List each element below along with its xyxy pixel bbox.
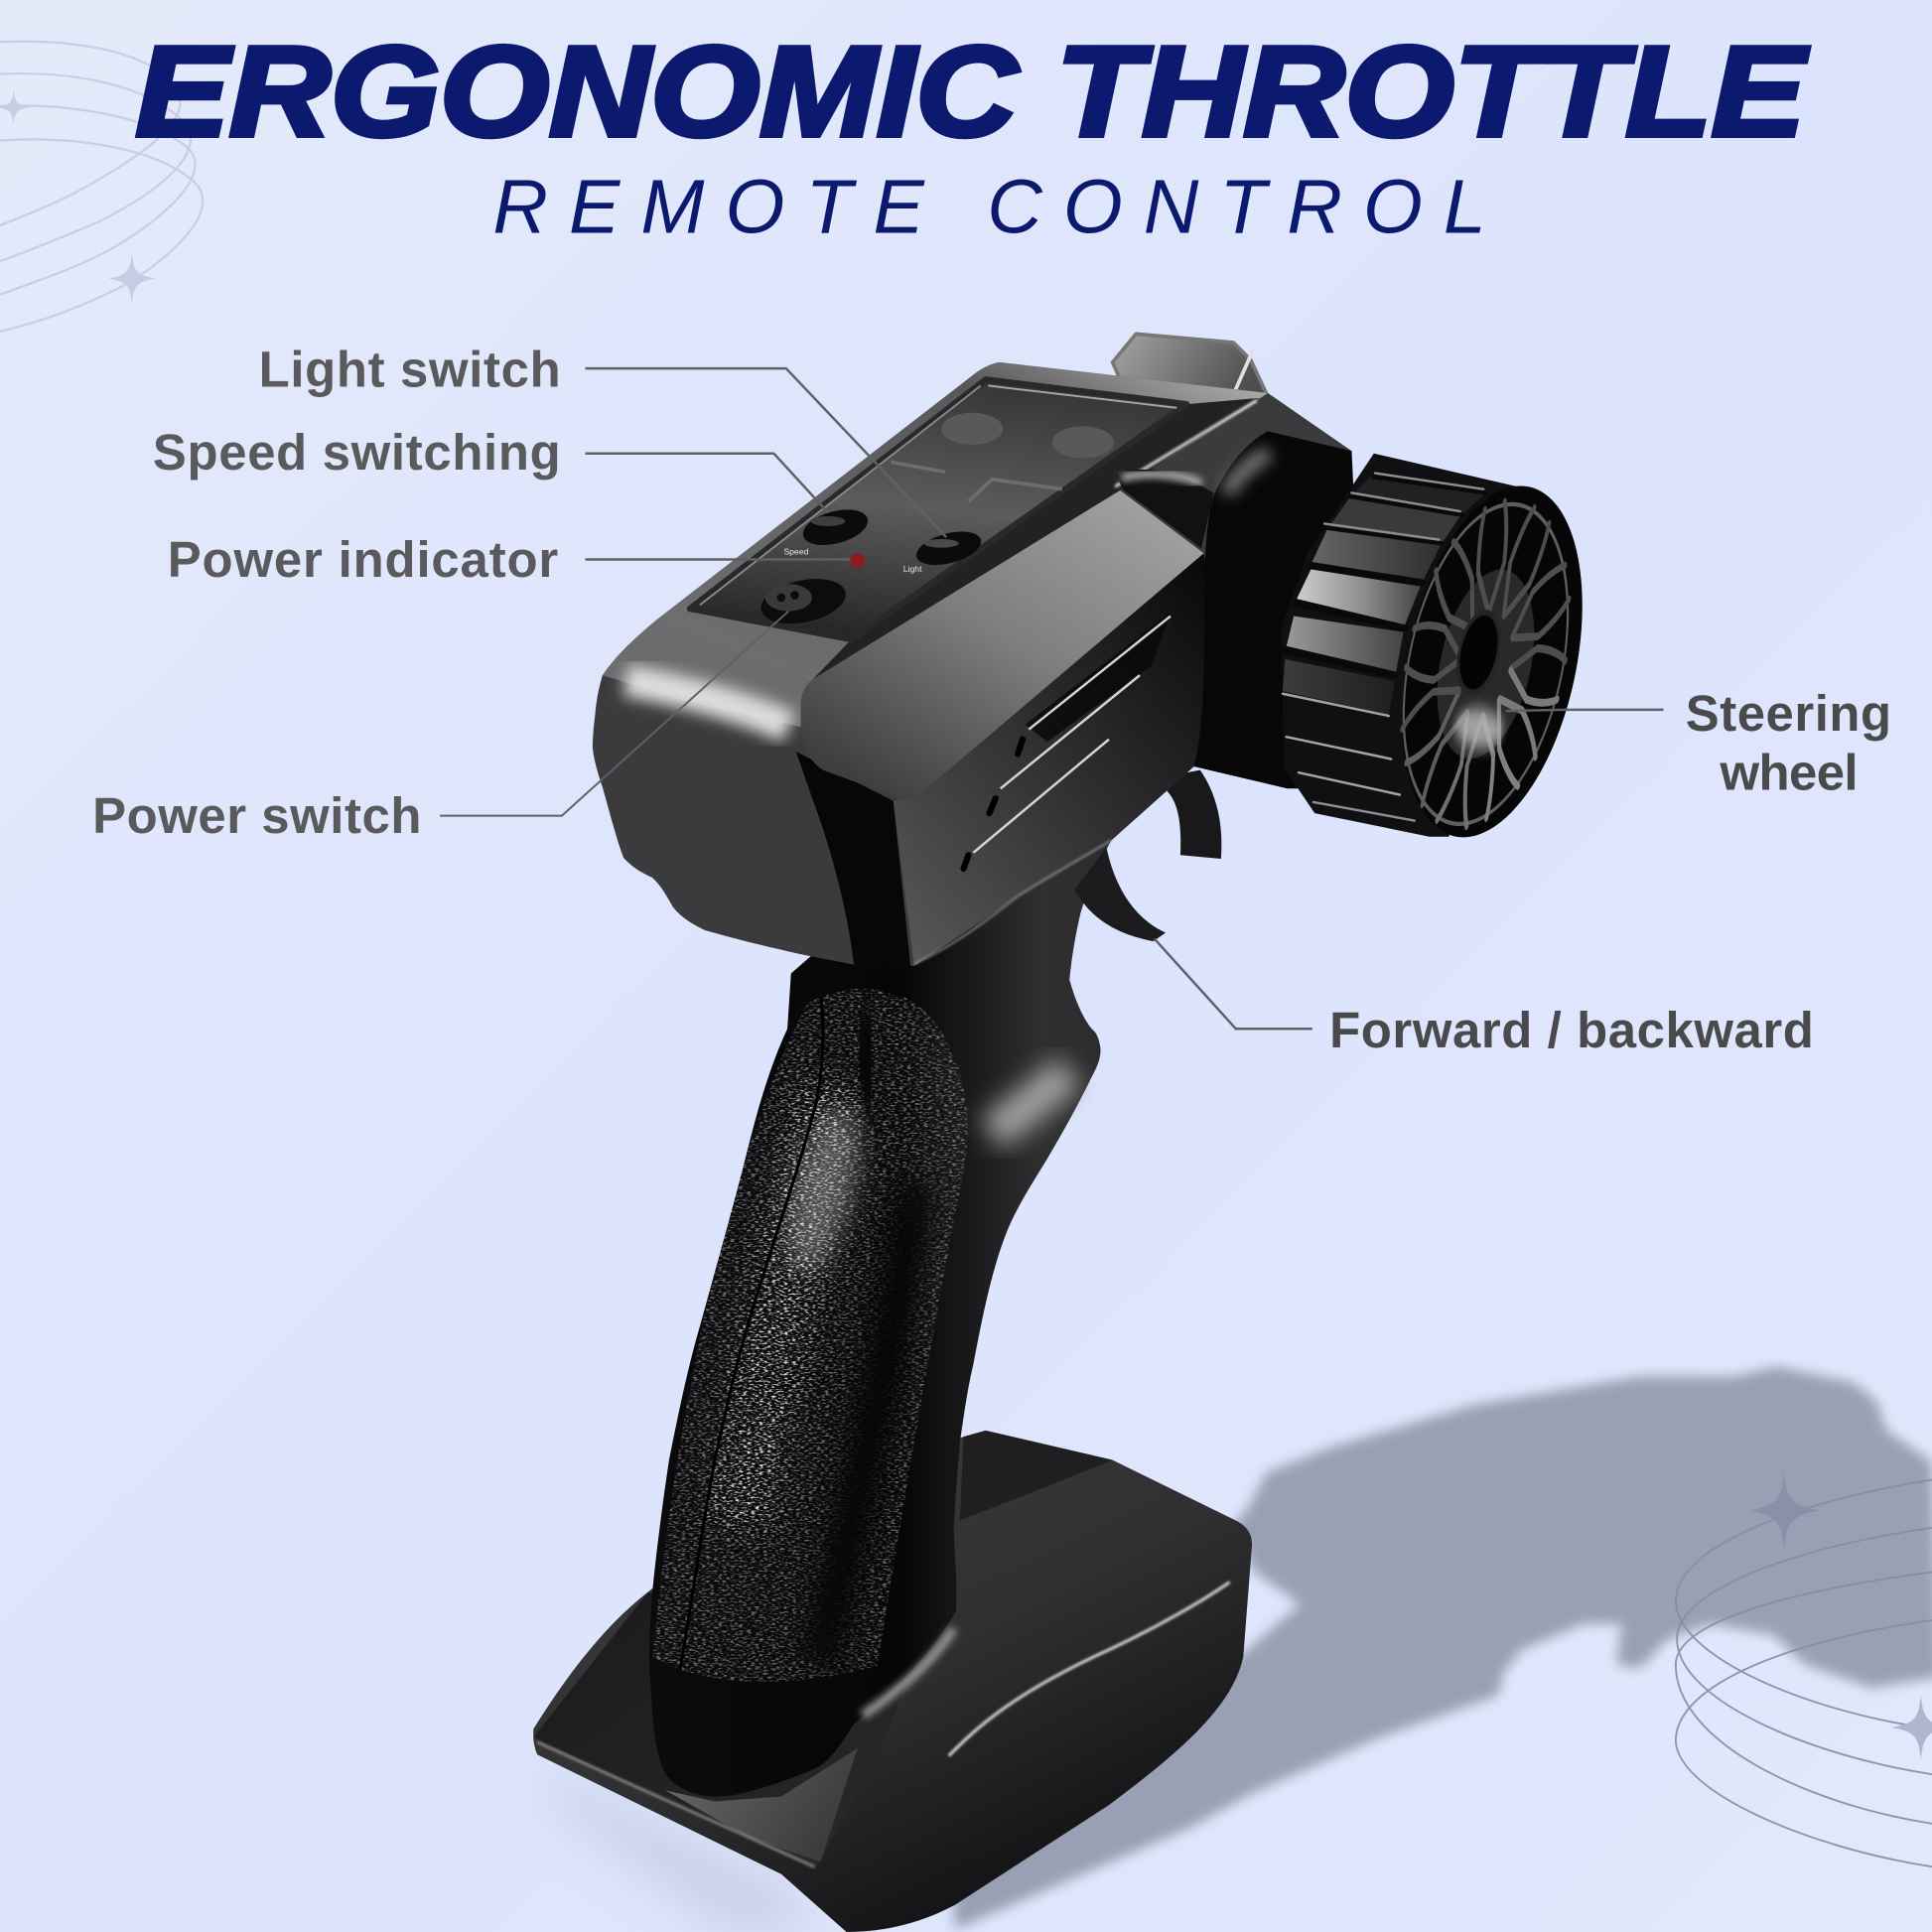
callout: forward / backward: Forward / backward [1329, 1002, 1814, 1058]
callout: forward / backward [1155, 939, 1814, 1058]
title: ERGONOMIC THROTTLE [136, 21, 1809, 164]
lower side face with slits [894, 553, 1232, 966]
power indicator LED [850, 553, 865, 568]
dark strip beside the panel [811, 398, 1259, 681]
callout: power switch: Power switch [92, 787, 421, 844]
callout: power switch [92, 612, 788, 844]
large gray facet [801, 490, 1204, 799]
cast shadow of the controller [936, 1366, 1932, 1930]
control panel [690, 379, 1186, 639]
neck barrel [1194, 431, 1368, 788]
grip leather texture [653, 989, 968, 1682]
light switch button [912, 525, 985, 571]
subtitle: REMOTE CONTROL [492, 165, 1486, 250]
control panel: Light [903, 564, 922, 574]
slit recess [1026, 613, 1171, 742]
lower throttle trigger [1074, 848, 1166, 941]
soft shadow below the base [542, 1768, 819, 1932]
grip and neck [617, 840, 1111, 1796]
callout: power indicator: Power indicator [168, 531, 558, 588]
callout: steering wheel [1506, 685, 1891, 801]
upper trigger [1165, 770, 1221, 859]
black strip [796, 752, 910, 966]
top surface [656, 362, 1268, 681]
controller head body [593, 362, 1351, 966]
decorative orbit rings: top left [0, 42, 203, 332]
steering wheel [1194, 431, 1611, 854]
callout: speed switching [153, 424, 828, 512]
speed switch button [799, 503, 872, 551]
decorative orbit rings: bottom right [1676, 1471, 1932, 1866]
front face upper gray [603, 620, 811, 727]
wheel face with spokes [1373, 470, 1611, 854]
callout: light switch: Light switch [259, 342, 561, 398]
front face highlight band [625, 680, 788, 727]
callout: steering wheel: Steering [1686, 685, 1891, 742]
vent slits [973, 617, 1171, 853]
ribbed grip [1282, 454, 1523, 837]
panel indents [941, 413, 1114, 459]
panel tiny labels: Speed [783, 546, 809, 556]
panel markings [891, 462, 1062, 501]
base plate [533, 1591, 911, 1870]
callout: light switch [259, 342, 946, 537]
charging base [533, 1431, 1252, 1932]
grip sheen [992, 1072, 1069, 1134]
callout: speed switching: Speed switching [153, 424, 561, 481]
power switch [757, 572, 850, 630]
base rear block [960, 1431, 1113, 1520]
antenna tab [1113, 334, 1268, 407]
product illustration: throttle remote control [533, 334, 1611, 1932]
callout: steering wheel: wheel [1720, 745, 1859, 801]
